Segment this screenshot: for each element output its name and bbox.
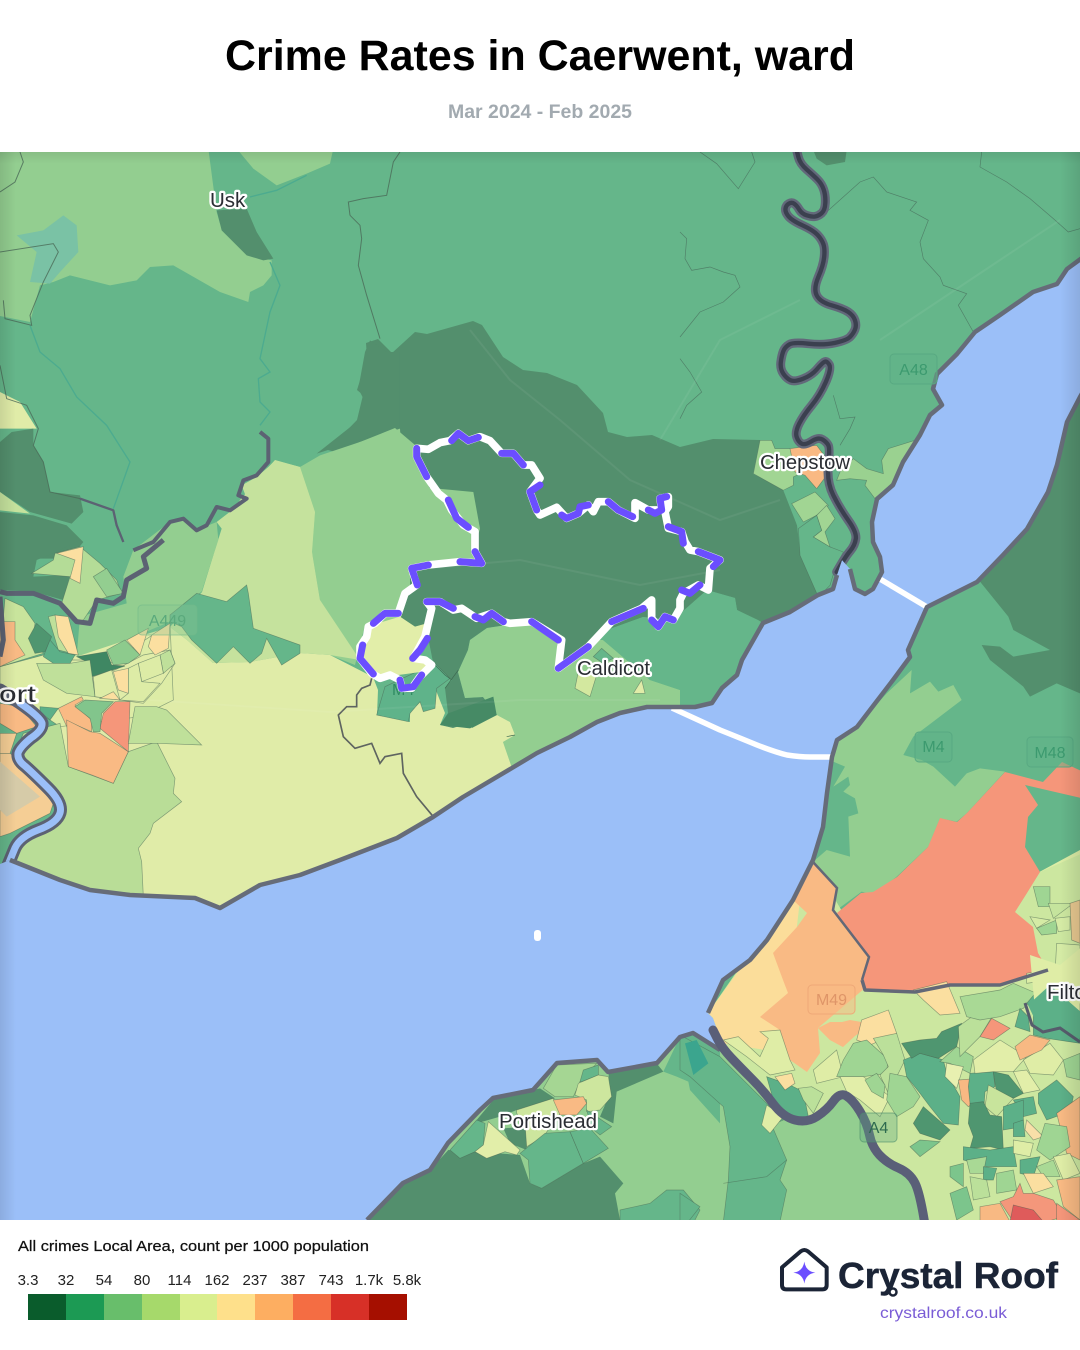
place labels xyxy=(0,189,1080,1133)
boundaries and stream lines xyxy=(680,152,1080,445)
legend tick labels: 54 xyxy=(96,1272,112,1289)
ward outline: Caerwent xyxy=(360,433,720,688)
wordmark: Crystal Roof xyxy=(838,1255,1059,1296)
legend tick labels: 80 xyxy=(134,1272,150,1289)
red zone lower boundary xyxy=(862,970,1048,992)
island marker xyxy=(534,930,541,941)
coastline: south Wales xyxy=(10,252,1080,908)
area: Avonmouth pale zone xyxy=(708,902,800,1050)
outline: purple dashes xyxy=(360,433,720,688)
legend tick labels: 32 xyxy=(58,1272,74,1289)
label: Chepstow: Chepstow xyxy=(760,451,850,474)
coastline: England Severn shore xyxy=(708,380,1080,1013)
area: west of ward xyxy=(300,428,475,665)
outline: white base xyxy=(360,433,720,688)
area: Newport cells xyxy=(0,519,300,897)
district boundary: Bristol north xyxy=(813,862,869,980)
water: Severn estuary xyxy=(0,262,1080,1220)
legend tick labels: 743 xyxy=(318,1272,344,1289)
area: big yellow Monmouthshire levels xyxy=(60,627,515,912)
badge: M4 east xyxy=(915,732,952,762)
label: Caldicot: Caldicot xyxy=(577,657,650,680)
legend tick labels: 5.8k xyxy=(393,1272,422,1289)
area: pale green wedge xyxy=(170,460,360,663)
legend tick labels: 3.3 xyxy=(18,1272,38,1289)
legend tick labels: 162 xyxy=(204,1272,230,1289)
river boundary: north of Newport xyxy=(80,432,268,550)
label: Usk: Usk xyxy=(210,189,246,212)
area: light green levels xyxy=(813,670,1005,910)
county boundary: Filton xyxy=(1025,1003,1080,1042)
area: Caldicot fringe xyxy=(458,620,690,768)
legend title: All crimes Local Area, count per 1000 population xyxy=(18,1238,369,1255)
legend tick labels: 387 xyxy=(280,1272,306,1289)
area: Caldicot town cells xyxy=(575,648,645,697)
river boundary: Newport north xyxy=(0,540,163,657)
badge: M48: M48 xyxy=(1034,745,1066,762)
area: east edge green xyxy=(1030,948,1080,1004)
legend tick labels: 1.7k xyxy=(355,1272,384,1289)
title: Crime Rates in Caerwent, ward xyxy=(225,32,855,80)
legend tick labels xyxy=(18,1272,422,1289)
subtitle: date range: Mar 2024 - Feb 2025 xyxy=(448,102,632,123)
land: south Wales xyxy=(0,140,1080,920)
wordmark keyhole dot xyxy=(890,1288,896,1296)
website: crystalroof.co.uk xyxy=(880,1305,1008,1322)
faint roads xyxy=(340,220,1060,712)
bridge: Prince of Wales Bridge xyxy=(672,708,832,757)
legend tick labels: 237 xyxy=(242,1272,268,1289)
badge: A449 xyxy=(138,605,197,635)
legend colour scale xyxy=(28,1294,407,1320)
legend tick labels: 114 xyxy=(168,1272,191,1289)
river: Usk at Newport xyxy=(0,690,60,880)
map edge shading xyxy=(0,152,1080,1220)
logo: Crystal Roof xyxy=(782,1250,1059,1322)
area: Chepstow cells xyxy=(753,150,915,597)
badge: M48 xyxy=(1027,737,1073,767)
area: south-east of ward xyxy=(603,592,737,705)
river: Wye xyxy=(781,150,856,587)
badge: A4 xyxy=(860,1113,897,1142)
badge: A48 xyxy=(890,354,937,384)
badge: M49 xyxy=(808,985,855,1014)
road badges xyxy=(138,354,1073,1142)
bridge: Severn Bridge xyxy=(880,579,927,607)
badge: M4 west: M4 xyxy=(392,682,414,699)
area: Avonmouth orange zone xyxy=(760,862,869,1072)
badge: M49: M49 xyxy=(816,992,847,1009)
area: Caerwent dark region xyxy=(328,321,818,728)
legend xyxy=(18,1238,422,1320)
badge: A48: A48 xyxy=(899,362,928,379)
land: North Somerset xyxy=(370,1036,920,1220)
area: high crime red zone xyxy=(837,762,1080,992)
area: north-west districts xyxy=(0,149,480,559)
badge: M4 east: M4 xyxy=(922,739,945,756)
land: England north of Avon xyxy=(690,377,1080,1230)
coastline: Portishead shore xyxy=(367,1033,720,1220)
badge: A4: A4 xyxy=(869,1120,888,1137)
area: green near M4 junction xyxy=(338,617,515,817)
badge: A449: A449 xyxy=(149,613,186,630)
area: south of Avon green xyxy=(680,1035,940,1222)
icon: house with star xyxy=(782,1250,827,1289)
area: Bristol mosaic base xyxy=(708,850,1080,1230)
river: Avon xyxy=(713,1030,925,1225)
area: Portishead cells xyxy=(367,1033,720,1223)
area: north-east dark xyxy=(814,402,1080,912)
label: Portishead: Portishead xyxy=(499,1110,597,1133)
area: right edge cells xyxy=(1027,887,1080,983)
area: Bristol cells xyxy=(723,980,1080,1222)
